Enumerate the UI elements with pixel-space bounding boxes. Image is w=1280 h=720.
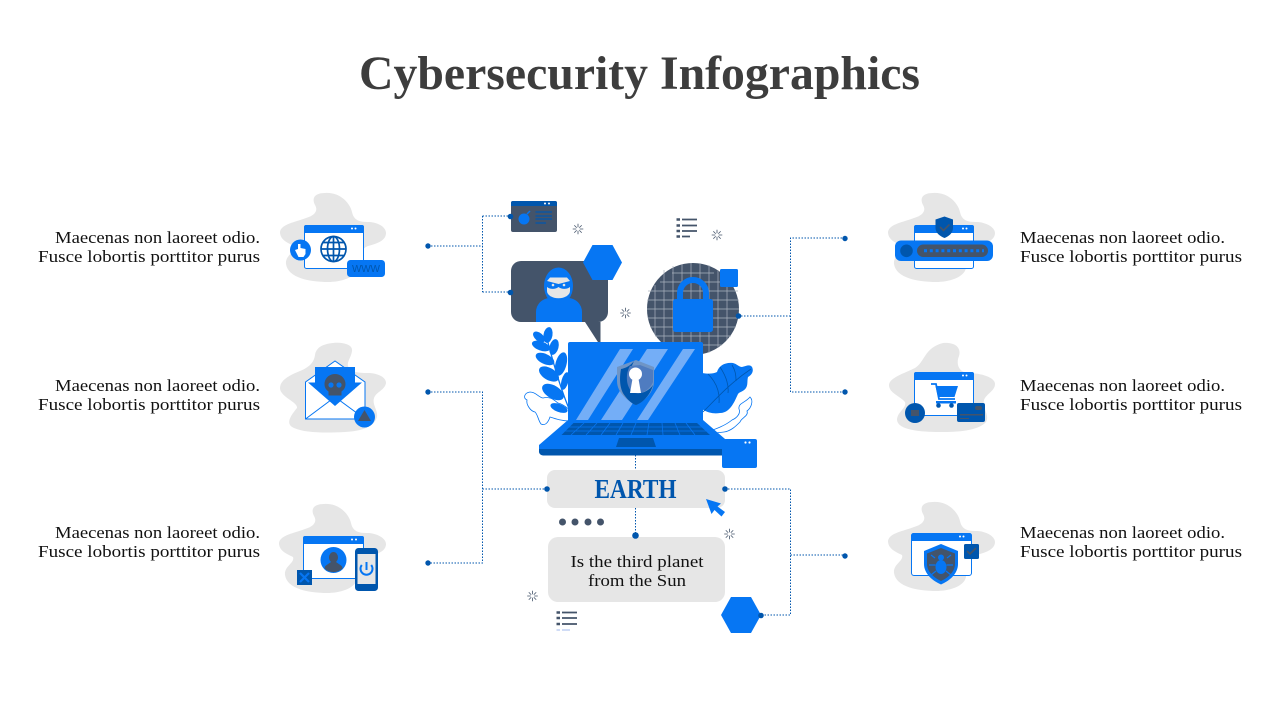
- browser window: [304, 225, 364, 268]
- browser window: [914, 225, 974, 268]
- hand click badge: [290, 240, 311, 260]
- blob background: [280, 193, 386, 282]
- www tag: WWW: [352, 264, 381, 275]
- right item 1: login: [888, 193, 995, 282]
- hexagon upper: [583, 245, 622, 280]
- description box: from the Sun: [588, 571, 687, 590]
- title: Cybersecurity Infographics: [359, 47, 920, 100]
- left text 3: [38, 523, 260, 561]
- right text 3: Fusce lobortis porttitor purus: [1020, 542, 1242, 561]
- left text 2: Maecenas non laoreet odio.: [55, 376, 260, 395]
- right text 1: [1020, 228, 1242, 266]
- right text 1: Maecenas non laoreet odio.: [1020, 228, 1225, 247]
- right text 2: Maecenas non laoreet odio.: [1020, 376, 1225, 395]
- padlock globe: [647, 263, 739, 355]
- globe icon: [321, 236, 346, 262]
- hexagon lower: [721, 597, 761, 633]
- right text 3: [1020, 523, 1242, 561]
- camera badge: [905, 403, 925, 423]
- four dots: [559, 518, 604, 526]
- shield with bug: [924, 544, 958, 584]
- top window with bomb: [511, 201, 557, 232]
- warning badge: [354, 406, 375, 428]
- browser window: [303, 536, 364, 578]
- left text 2: [38, 376, 260, 414]
- left text 3: Fusce lobortis porttitor purus: [38, 542, 260, 561]
- laptop base: [539, 420, 732, 455]
- shield keyhole: [617, 360, 654, 405]
- blob background: [888, 502, 995, 591]
- blob background: [889, 343, 995, 432]
- cursor arrow: [706, 499, 725, 516]
- skull: [324, 374, 346, 396]
- left item 3: user and phone: [279, 504, 386, 593]
- list icon top: [676, 220, 697, 236]
- right item 2: shopping: [889, 343, 995, 432]
- padlock: [673, 280, 713, 332]
- check square: [964, 544, 979, 559]
- connector dots: [508, 214, 764, 618]
- sparkles: [528, 224, 734, 601]
- browser window: [911, 533, 972, 576]
- phone with power icon: [355, 548, 378, 591]
- hacker figure: [536, 268, 582, 322]
- right item 3: bug shield: [888, 502, 995, 591]
- browser window: [914, 372, 974, 416]
- trackpad: [616, 438, 656, 447]
- connector lines: [425, 216, 848, 615]
- envelope: [306, 361, 365, 419]
- description box: Is the third planet: [570, 552, 704, 571]
- left text 2: Fusce lobortis porttitor purus: [38, 395, 260, 414]
- password bar: [895, 240, 993, 261]
- right text 3: Maecenas non laoreet odio.: [1020, 523, 1225, 542]
- credit card: [957, 403, 985, 422]
- EARTH label: EARTH: [594, 474, 676, 504]
- keyboard: [562, 423, 710, 435]
- central illustration: [511, 201, 757, 601]
- shopping cart: [931, 384, 958, 408]
- speech bubble with hacker: [511, 261, 608, 346]
- left text 1: Fusce lobortis porttitor purus: [38, 247, 260, 266]
- left item 1: web browser: [280, 193, 386, 282]
- right text 2: [1020, 376, 1242, 414]
- leaf right: [702, 363, 753, 433]
- right text 1: Fusce lobortis porttitor purus: [1020, 247, 1242, 266]
- close square: [297, 570, 312, 585]
- user avatar: [320, 547, 346, 573]
- laptop: [539, 342, 732, 456]
- blob background: [280, 343, 386, 433]
- right text 2: Fusce lobortis porttitor purus: [1020, 395, 1242, 414]
- left item 2: phishing email: [280, 343, 386, 433]
- plant left: [525, 326, 571, 425]
- left text 1: Maecenas non laoreet odio.: [55, 228, 260, 247]
- blob background: [888, 193, 995, 282]
- connector dot: [632, 532, 639, 539]
- shield check: [936, 216, 953, 238]
- screen glare stripes: [576, 349, 695, 420]
- laptop screen: [568, 342, 703, 422]
- left text 1: [38, 228, 260, 266]
- description box: [548, 537, 725, 602]
- small window lower right: [722, 439, 757, 468]
- left text 3: Maecenas non laoreet odio.: [55, 523, 260, 542]
- blue square: [720, 269, 738, 287]
- EARTH label: [544, 470, 728, 508]
- list icon bottom: [556, 612, 577, 630]
- blob background: [279, 504, 386, 593]
